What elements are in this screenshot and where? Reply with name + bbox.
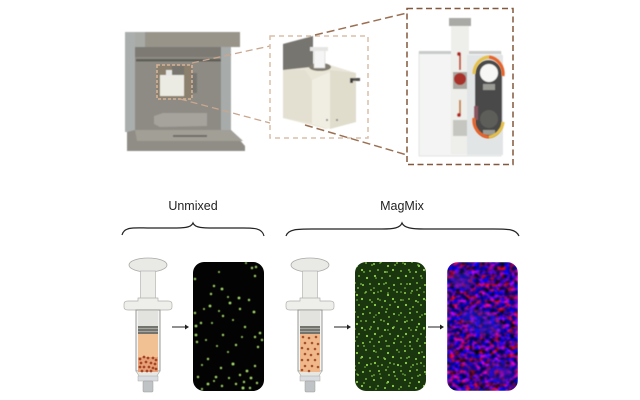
arrow: syringe to magmix image: [334, 324, 351, 330]
mixer module: [283, 36, 360, 129]
rotation arrows: [474, 57, 503, 137]
settled cells: [138, 356, 158, 372]
label: Unmixed: Unmixed: [168, 199, 218, 213]
mechanism cross-section: [419, 18, 503, 156]
zoom box: instrument module: [157, 65, 192, 99]
liquid: [138, 334, 158, 372]
mixed liquid: [300, 334, 320, 372]
dashed zoom lines right: [305, 13, 407, 155]
fluorescence image: magmix: [355, 262, 426, 391]
red magnet: [453, 72, 467, 89]
dispersed cells: [301, 336, 319, 372]
dashed zoom lines left: [180, 46, 270, 123]
arrow: magmix image to stained tissue: [428, 324, 444, 330]
sample tube: [310, 47, 328, 68]
side knob: [350, 78, 360, 83]
rotor arm: [475, 60, 502, 138]
miniature module in enclosure: [157, 65, 192, 98]
fluorescence image: unmixed: [193, 262, 264, 391]
label: MagMix: MagMix: [380, 199, 425, 213]
arrow: syringe to unmixed image: [172, 324, 189, 330]
brace: Unmixed: [122, 223, 264, 236]
instrument enclosure: [125, 32, 245, 151]
dashed zoom box right: [407, 8, 513, 164]
dashed zoom box centre: [270, 36, 368, 138]
syringe: unmixed: [124, 258, 172, 392]
stained tissue image: [447, 262, 518, 391]
brace: MagMix: [286, 223, 519, 236]
syringe: magmix: [286, 258, 334, 392]
